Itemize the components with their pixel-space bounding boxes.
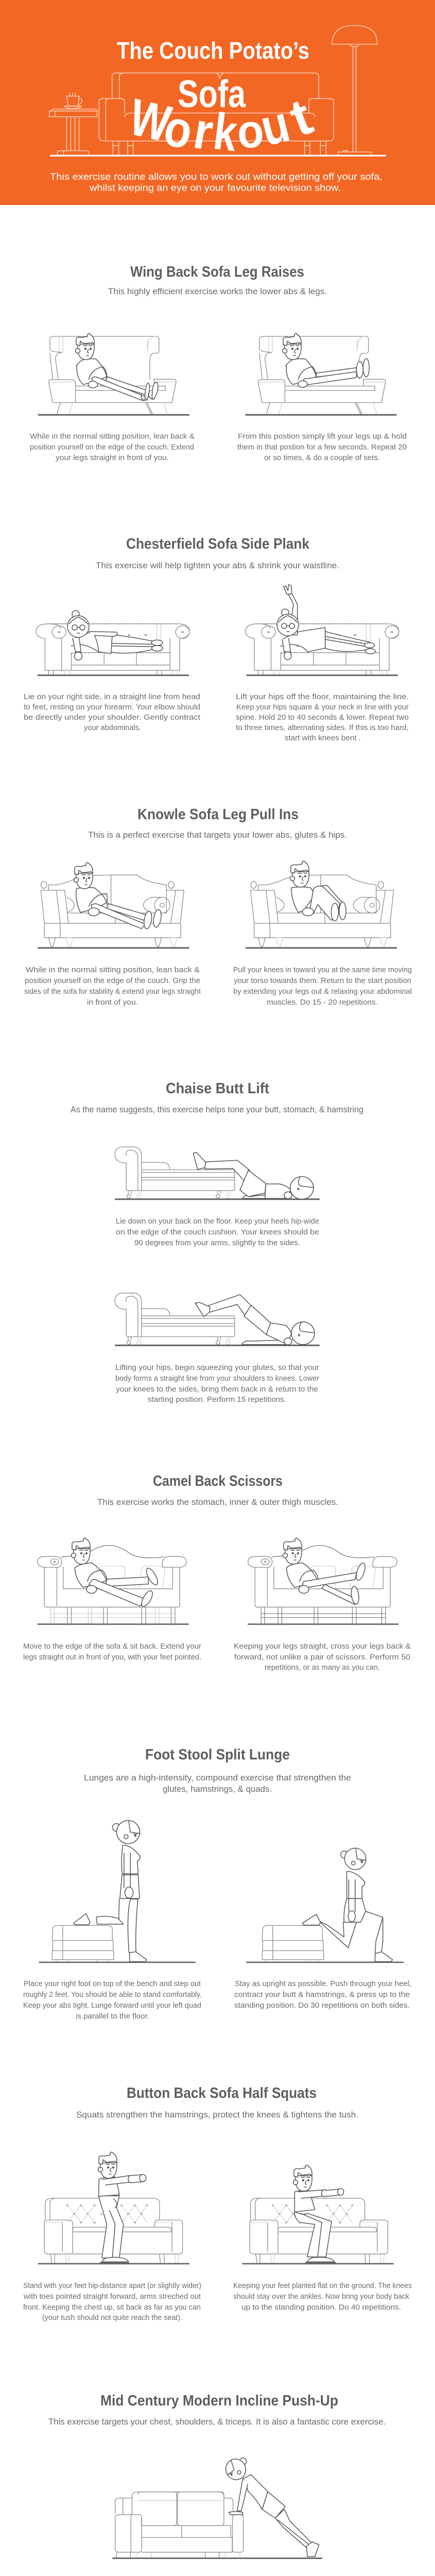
illustration: lunge down	[247, 1848, 404, 1963]
illustration: legs scissor crossed	[248, 1538, 398, 1625]
step text left: with toes pointed straight forward, arms streched out	[23, 2293, 201, 2301]
description: As the name suggests, this exercise helps tone your butt, stomach, & hamstring	[71, 1105, 363, 1114]
step text left: position yourself on the edge of the couch. Extend	[30, 444, 194, 452]
illustration: side plank raised	[246, 585, 399, 676]
title: Workout, arched letters: k	[211, 103, 240, 162]
illustration: sitting, legs extended	[38, 333, 189, 416]
panel: Foot Stool Split Lunge	[23, 1747, 411, 2021]
illustration: hips lifted	[115, 1293, 320, 1346]
description: This exercise targets your chest, shoulders, & triceps. It is also a fantastic core exercise.	[48, 2417, 386, 2427]
intro text: whilst keeping an eye on your favourite television show.	[89, 182, 341, 193]
step text left	[23, 2282, 201, 2322]
step text right: forward, not unlike a pair of scissors. Perform 50	[234, 1653, 410, 1662]
step text left: Keep your abs tight. Lunge forward until your left quad	[23, 2002, 201, 2010]
illustration: half squat	[242, 2165, 394, 2264]
illustration: side plank low	[36, 611, 189, 676]
step text left: front. Keeping the chest up, sit back as far as you can	[23, 2303, 201, 2312]
heading: Foot Stool Split Lunge	[145, 1747, 290, 1763]
intro text: This exercise routine allows you to work out without getting off your sofa,	[50, 172, 382, 182]
step text right: contract your butt & hamstrings, & press up to the	[234, 1991, 410, 1999]
panel: Chesterfield Sofa Side Plank	[24, 536, 409, 742]
step text: Lie down on your back on the floor. Keep your heels hip-wide	[116, 1217, 319, 1226]
step text	[116, 1217, 319, 1247]
step text right: Lift your hips off the floor, maintaining the line.	[236, 693, 409, 701]
illustration: standing, arms forward	[38, 2152, 189, 2264]
step text right: Keep your hips square & your neck in line with your	[236, 703, 409, 711]
illustration: legs scissor down	[38, 1538, 188, 1625]
step text left: in front of you.	[87, 998, 138, 1007]
step text left: position yourself on the edge of the couch. Grip the	[25, 977, 200, 985]
step text left: is parallel to the floor.	[76, 2012, 149, 2021]
description: Lunges are a high-intensity, compound exercise that strengthen the	[84, 1773, 351, 1783]
step text right: muscles. Do 15 - 20 repetitions.	[267, 998, 378, 1007]
step text left: While in the normal sitting position, lean back &	[30, 433, 195, 441]
panel: Button Back Sofa Half Squats	[23, 2085, 412, 2322]
description: This exercise will help tighten your abs & shrink your waistline.	[96, 561, 339, 570]
title: Workout, arched letters	[124, 87, 320, 162]
step text left: your legs straight in front of you.	[56, 454, 169, 462]
step text left: your abdominals.	[84, 724, 141, 732]
step text right	[234, 1980, 411, 2010]
intro text	[50, 172, 382, 193]
step text right: them in that postion for a few seconds. Repeat 20	[237, 444, 407, 452]
step text left: sides of the sofa for stability & extend your legs straight	[24, 988, 201, 996]
header banner	[0, 0, 435, 205]
step text right: your torso towards them. Return to the start position	[234, 977, 411, 985]
panel: Mid Century Modern Incline Push-Up	[48, 2393, 386, 2576]
heading: Knowle Sofa Leg Pull Ins	[137, 806, 299, 823]
step text left	[30, 433, 195, 462]
title: Workout, arched letters: u	[255, 94, 295, 157]
step text left: While in the normal sitting position, lean back &	[26, 966, 200, 974]
description: This highly efficient exercise works the lower abs & legs.	[108, 287, 327, 296]
step text right: Keeping your legs straight, cross your legs back &	[234, 1642, 411, 1651]
step text right: From this postion simply lift your legs up & hold	[238, 433, 407, 441]
illustration: legs raised	[245, 333, 397, 416]
panel: Wing Back Sofa Leg Raises	[30, 264, 407, 462]
step text left: Move to the edge of the sofa & sit back. Extend your	[23, 1642, 201, 1651]
heading: Camel Back Scissors	[153, 1473, 283, 1489]
title: Workout, arched letters: t	[282, 87, 320, 147]
step text left: roughly 2 feet. You should be able to stand comfortably.	[23, 1991, 202, 1999]
step text right	[233, 966, 412, 1007]
description: This is a perfect exercise that targets your lower abs, glutes & hips.	[88, 831, 347, 840]
step text: your knees to the sides, bring them back in & return to the	[116, 1385, 318, 1394]
illustration: legs extended	[38, 862, 189, 948]
panel: Knowle Sofa Leg Pull Ins	[24, 806, 412, 1007]
step text right	[234, 1642, 411, 1672]
step text: body forms a straight line from your shoulders to knees. Lower	[115, 1375, 319, 1383]
illustration: lying on floor, heels on chaise	[115, 1147, 320, 1200]
panel: Chaise Butt Lift	[71, 1080, 363, 1404]
description	[84, 1773, 351, 1794]
title: Workout, arched letters: r	[189, 102, 217, 161]
step text left: (your tush should not quite reach the seat).	[42, 2314, 182, 2322]
title: Workout, arched letters: o	[236, 104, 265, 158]
step text right: should stay over the ankles. Now bring your body back	[233, 2293, 410, 2301]
heading: Chesterfield Sofa Side Plank	[126, 536, 310, 552]
step text left	[23, 1980, 202, 2021]
step text right	[233, 2282, 412, 2312]
step text: on the edge of the couch cushion. Your knees should be	[116, 1228, 319, 1236]
step text right: Stay as upright as possible. Push through your heel,	[235, 1980, 411, 1988]
step text right	[237, 433, 407, 462]
illustration: standing, foot on stool	[39, 1821, 196, 1963]
step text left	[24, 966, 201, 1007]
title: Workout, arched letters: W	[124, 88, 176, 153]
step text right: by extending your legs out & relaxing your abdominal	[233, 988, 412, 996]
heading: Button Back Sofa Half Squats	[127, 2085, 317, 2102]
step text left: be directly under your shoulder. Gently contract	[24, 714, 200, 722]
step text left: Place your right foot on top of the bench and step out	[24, 1980, 201, 1988]
step text right: repetitions, or as many as you can.	[265, 1664, 380, 1672]
step text: Lifting your hips, begin squeezing your glutes, so that your	[115, 1364, 319, 1372]
step text	[115, 1364, 319, 1404]
step text right: up to the standing position. Do 40 repetitions.	[241, 2303, 401, 2312]
description: This exercise works the stomach, inner & outer thigh muscles.	[97, 1498, 338, 1507]
step text right: Pull your knees in toward you at the same time moving	[233, 966, 412, 974]
step text left: legs straight out in front of you, with your feet pointed.	[23, 1653, 201, 1662]
step text left	[23, 1642, 201, 1662]
heading: Wing Back Sofa Leg Raises	[130, 264, 304, 280]
step text right: Keeping your feet planted flat on the ground. The knees	[233, 2282, 412, 2290]
title: Workout, arched letters: o	[159, 98, 198, 160]
step text right: start with knees bent .	[285, 734, 361, 742]
step text: starting position. Perform 15 repetitions.	[148, 1396, 286, 1404]
header illustration: sofa, side table and lamp	[49, 25, 386, 157]
heading: Mid Century Modern Incline Push-Up	[100, 2393, 338, 2409]
illustration: knees pulled in	[246, 861, 397, 948]
step text left	[24, 693, 200, 732]
step text left: Stand with your feet hip-distance apart (or slightly wider)	[23, 2282, 201, 2290]
step text right: to three times, alternating sides. If this is too hard,	[236, 724, 409, 732]
description: glutes, hamstrings, & quads.	[163, 1785, 272, 1794]
illustration: incline push-up, arms straight	[112, 2454, 322, 2559]
step text right: spine. Hold 20 to 40 seconds & lower. Repeat two	[236, 714, 409, 722]
step text left: Lie on your right side, in a straight line from head	[24, 693, 200, 701]
panel: Camel Back Scissors	[23, 1473, 411, 1672]
step text: 90 degrees from your arms, slightly to the sides.	[134, 1239, 300, 1247]
step text left: to feet, resting on your forearm. Your elbow should	[24, 703, 200, 711]
step text right	[236, 693, 409, 742]
heading: Chaise Butt Lift	[166, 1080, 269, 1097]
title: Sofa: Sofa	[178, 72, 246, 115]
step text right: standing position. Do 30 repetitions on both sides.	[234, 2002, 410, 2010]
title: The Couch Potato's: The Couch Potato’s	[117, 37, 309, 64]
description: Squats strengthen the hamstrings, protect the knees & tightens the tush.	[76, 2110, 358, 2120]
step text right: or so times, & do a couple of sets.	[264, 454, 380, 462]
